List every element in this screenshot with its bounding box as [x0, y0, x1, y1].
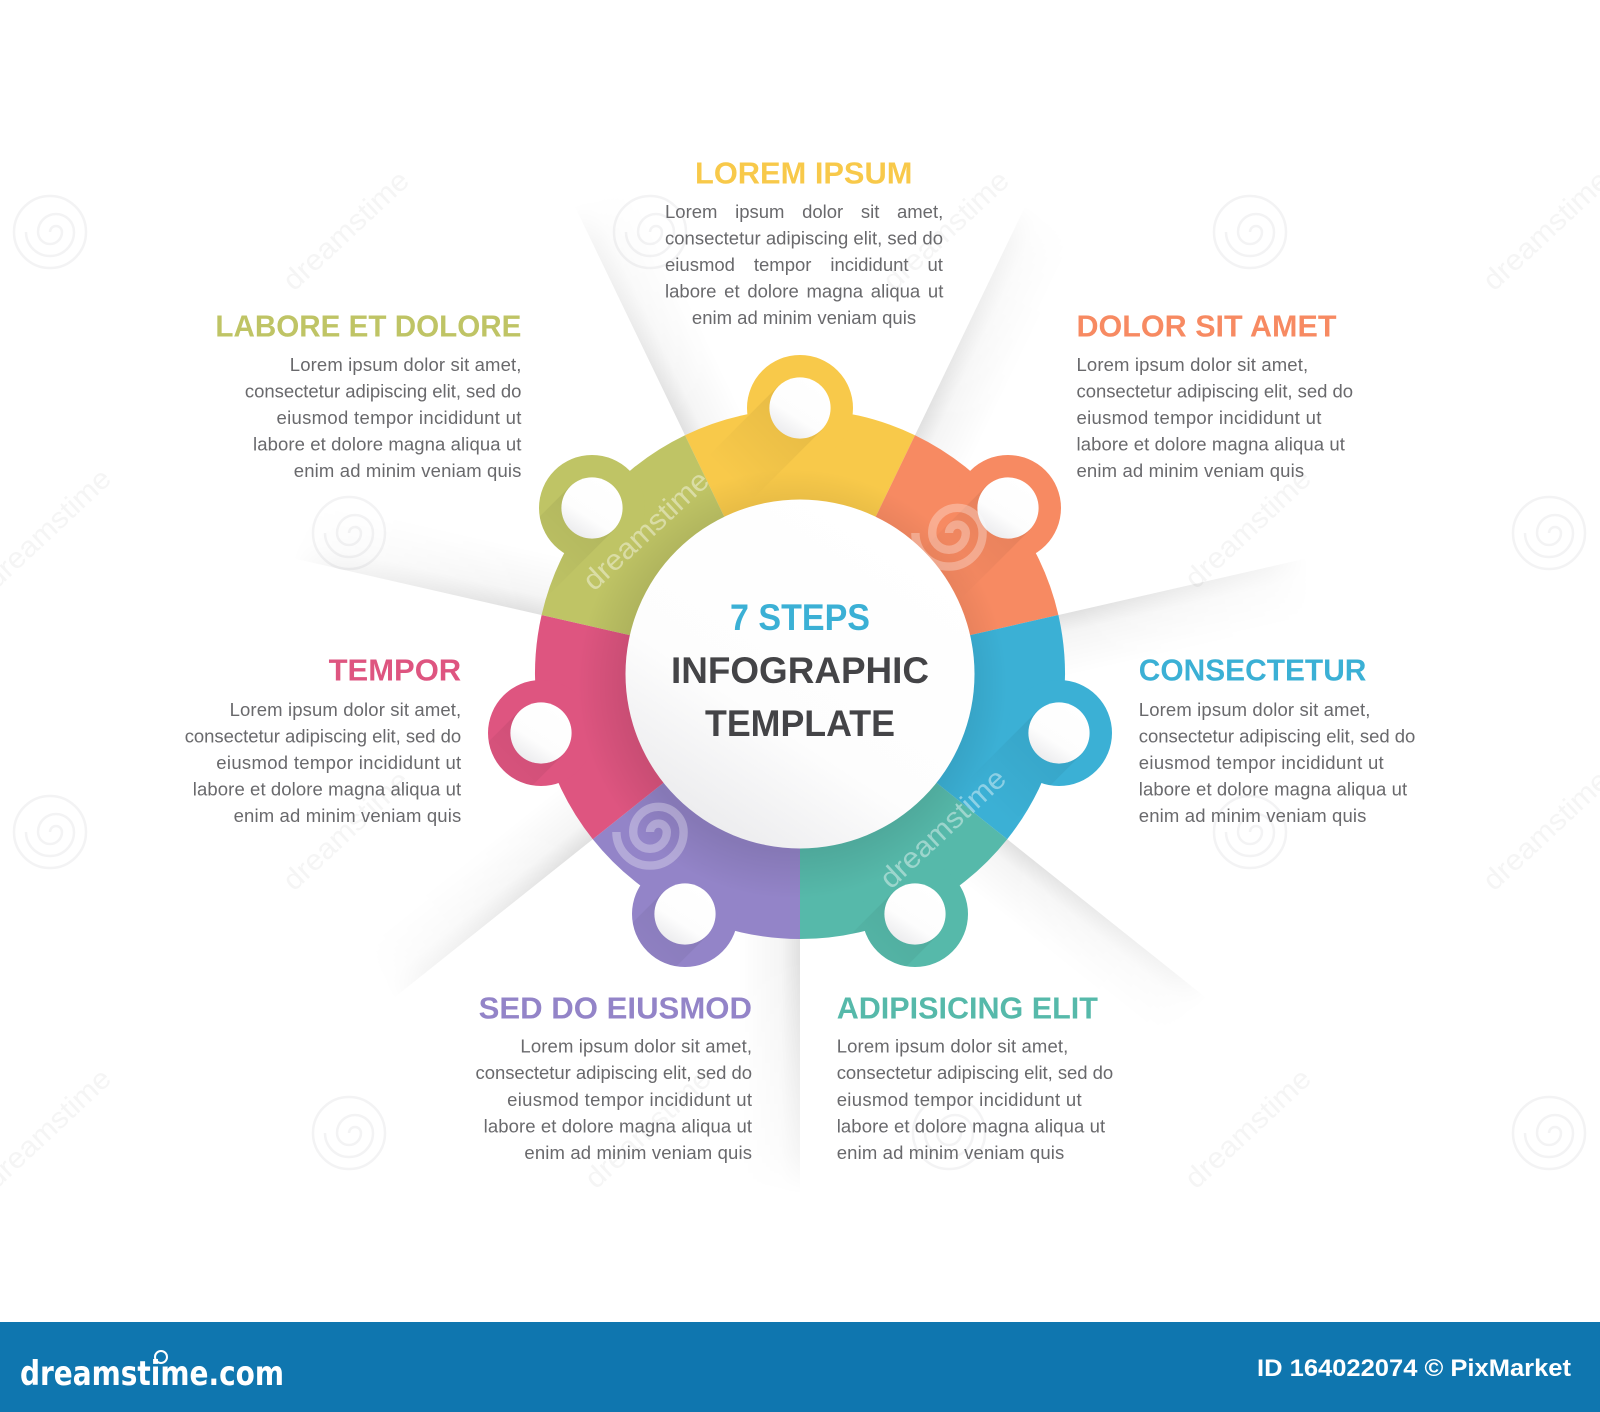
step: adipisicing elit: ADIPISICING ELIT: [837, 991, 1098, 1025]
step: labore et dolore: consectetur adipiscing elit, sed do: [245, 381, 521, 402]
step: consectetur: eiusmod tempor incididunt ut: [1139, 752, 1384, 773]
step: dolor sit amet: [1076, 310, 1353, 481]
step: consectetur: enim ad minim veniam quis: [1139, 805, 1366, 826]
segment: orange: [800, 435, 1061, 674]
step: tempor: [185, 654, 461, 826]
watermark captions: [0, 165, 1600, 1195]
center circle: [626, 500, 974, 848]
step: lorem ipsum: Lorem ipsum dolor sit amet,: [665, 201, 943, 222]
step: tempor: eiusmod tempor incididunt ut: [216, 752, 461, 773]
segment: blue: [800, 615, 1112, 839]
step: tempor: labore et dolore magna aliqua ut: [193, 779, 461, 800]
step: labore et dolore: Lorem ipsum dolor sit amet,: [290, 354, 521, 375]
step: sed do eiusmod: enim ad minim veniam quis: [524, 1142, 752, 1163]
step: consectetur: Lorem ipsum dolor sit amet,: [1139, 699, 1370, 720]
step: labore et dolore: [215, 310, 521, 481]
step: labore et dolore: LABORE ET DOLORE: [215, 310, 521, 344]
segment: green: [539, 435, 800, 674]
segment: yellow: [685, 355, 915, 674]
step: adipisicing elit: consectetur adipiscing elit, sed do: [837, 1062, 1113, 1083]
watermark captions: dreamstime: [1179, 1063, 1318, 1195]
step: dolor sit amet: enim ad minim veniam quis: [1076, 460, 1304, 481]
step: consectetur: [1139, 654, 1415, 826]
watermark captions: dreamstime: [877, 165, 1016, 297]
step: consectetur: consectetur adipiscing elit, sed do: [1139, 726, 1415, 746]
step: lorem ipsum: labore et dolore magna aliqua ut: [665, 281, 943, 302]
watermark on ring: dreamstime: [874, 763, 1013, 895]
center label: 7 steps: 7 STEPS: [730, 597, 870, 638]
segmented ring: [488, 355, 1112, 967]
watermark captions: dreamstime: [277, 765, 416, 897]
step: sed do eiusmod: consectetur adipiscing elit, sed do: [476, 1062, 752, 1083]
step: lorem ipsum: LOREM IPSUM: [695, 157, 912, 191]
step: tempor: Lorem ipsum dolor sit amet,: [230, 699, 461, 720]
step: adipisicing elit: [837, 991, 1113, 1163]
watermark captions: dreamstime: [579, 1063, 718, 1195]
step: adipisicing elit: enim ad minim veniam quis: [837, 1142, 1064, 1163]
step: sed do eiusmod: eiusmod tempor incididunt ut: [507, 1089, 752, 1110]
watermark pattern: [14, 196, 1585, 1169]
center label: infographic: INFOGRAPHIC: [671, 650, 929, 691]
step: dolor sit amet: DOLOR SIT AMET: [1076, 310, 1337, 344]
step: dolor sit amet: labore et dolore magna aliqua ut: [1076, 434, 1345, 455]
footer logo: dreamstime.com: [20, 1354, 284, 1394]
step: lorem ipsum: eiusmod tempor incididunt ut: [665, 254, 943, 275]
watermark captions: dreamstime: [1179, 463, 1318, 595]
step: adipisicing elit: labore et dolore magna aliqua ut: [837, 1115, 1105, 1136]
center label: template: TEMPLATE: [705, 703, 895, 744]
watermark on ring: dreamstime: [577, 465, 716, 597]
footer image id: ID 164022074 © PixMarket: [1257, 1355, 1571, 1382]
step: lorem ipsum: [665, 157, 943, 328]
step: tempor: TEMPOR: [329, 654, 461, 688]
step: lorem ipsum: consectetur adipiscing elit, sed do: [665, 228, 943, 249]
step: labore et dolore: labore et dolore magna aliqua ut: [253, 434, 521, 455]
step: adipisicing elit: Lorem ipsum dolor sit amet,: [837, 1036, 1068, 1057]
step: consectetur: labore et dolore magna aliqua ut: [1139, 779, 1407, 800]
step: sed do eiusmod: [476, 991, 752, 1163]
segment: purple: [593, 674, 800, 967]
step: adipisicing elit: eiusmod tempor incididunt ut: [837, 1089, 1082, 1110]
step: lorem ipsum: enim ad minim veniam quis: [692, 307, 916, 328]
step: sed do eiusmod: SED DO EIUSMOD: [479, 991, 752, 1025]
step: dolor sit amet: eiusmod tempor incididunt ut: [1076, 407, 1321, 428]
watermark captions: dreamstime: [277, 165, 416, 297]
step: dolor sit amet: Lorem ipsum dolor sit amet,: [1076, 354, 1308, 375]
segment: teal: [800, 674, 1007, 967]
step: consectetur: CONSECTETUR: [1139, 654, 1366, 688]
step: tempor: consectetur adipiscing elit, sed do: [185, 726, 461, 746]
step: tempor: enim ad minim veniam quis: [234, 805, 461, 826]
step: sed do eiusmod: labore et dolore magna aliqua ut: [484, 1115, 752, 1136]
step markers: [510, 377, 1090, 945]
step: labore et dolore: eiusmod tempor incididunt ut: [276, 407, 521, 428]
radial ray shadows: [328, 237, 1272, 1158]
segment: pink: [488, 615, 800, 839]
watermark on ring: [577, 465, 1013, 895]
long shadows on ring: [489, 381, 1080, 963]
step: sed do eiusmod: Lorem ipsum dolor sit amet,: [520, 1036, 752, 1057]
step: dolor sit amet: consectetur adipiscing elit, sed do: [1076, 381, 1353, 402]
footer banner: [0, 1322, 1600, 1412]
step: labore et dolore: enim ad minim veniam quis: [294, 460, 521, 481]
